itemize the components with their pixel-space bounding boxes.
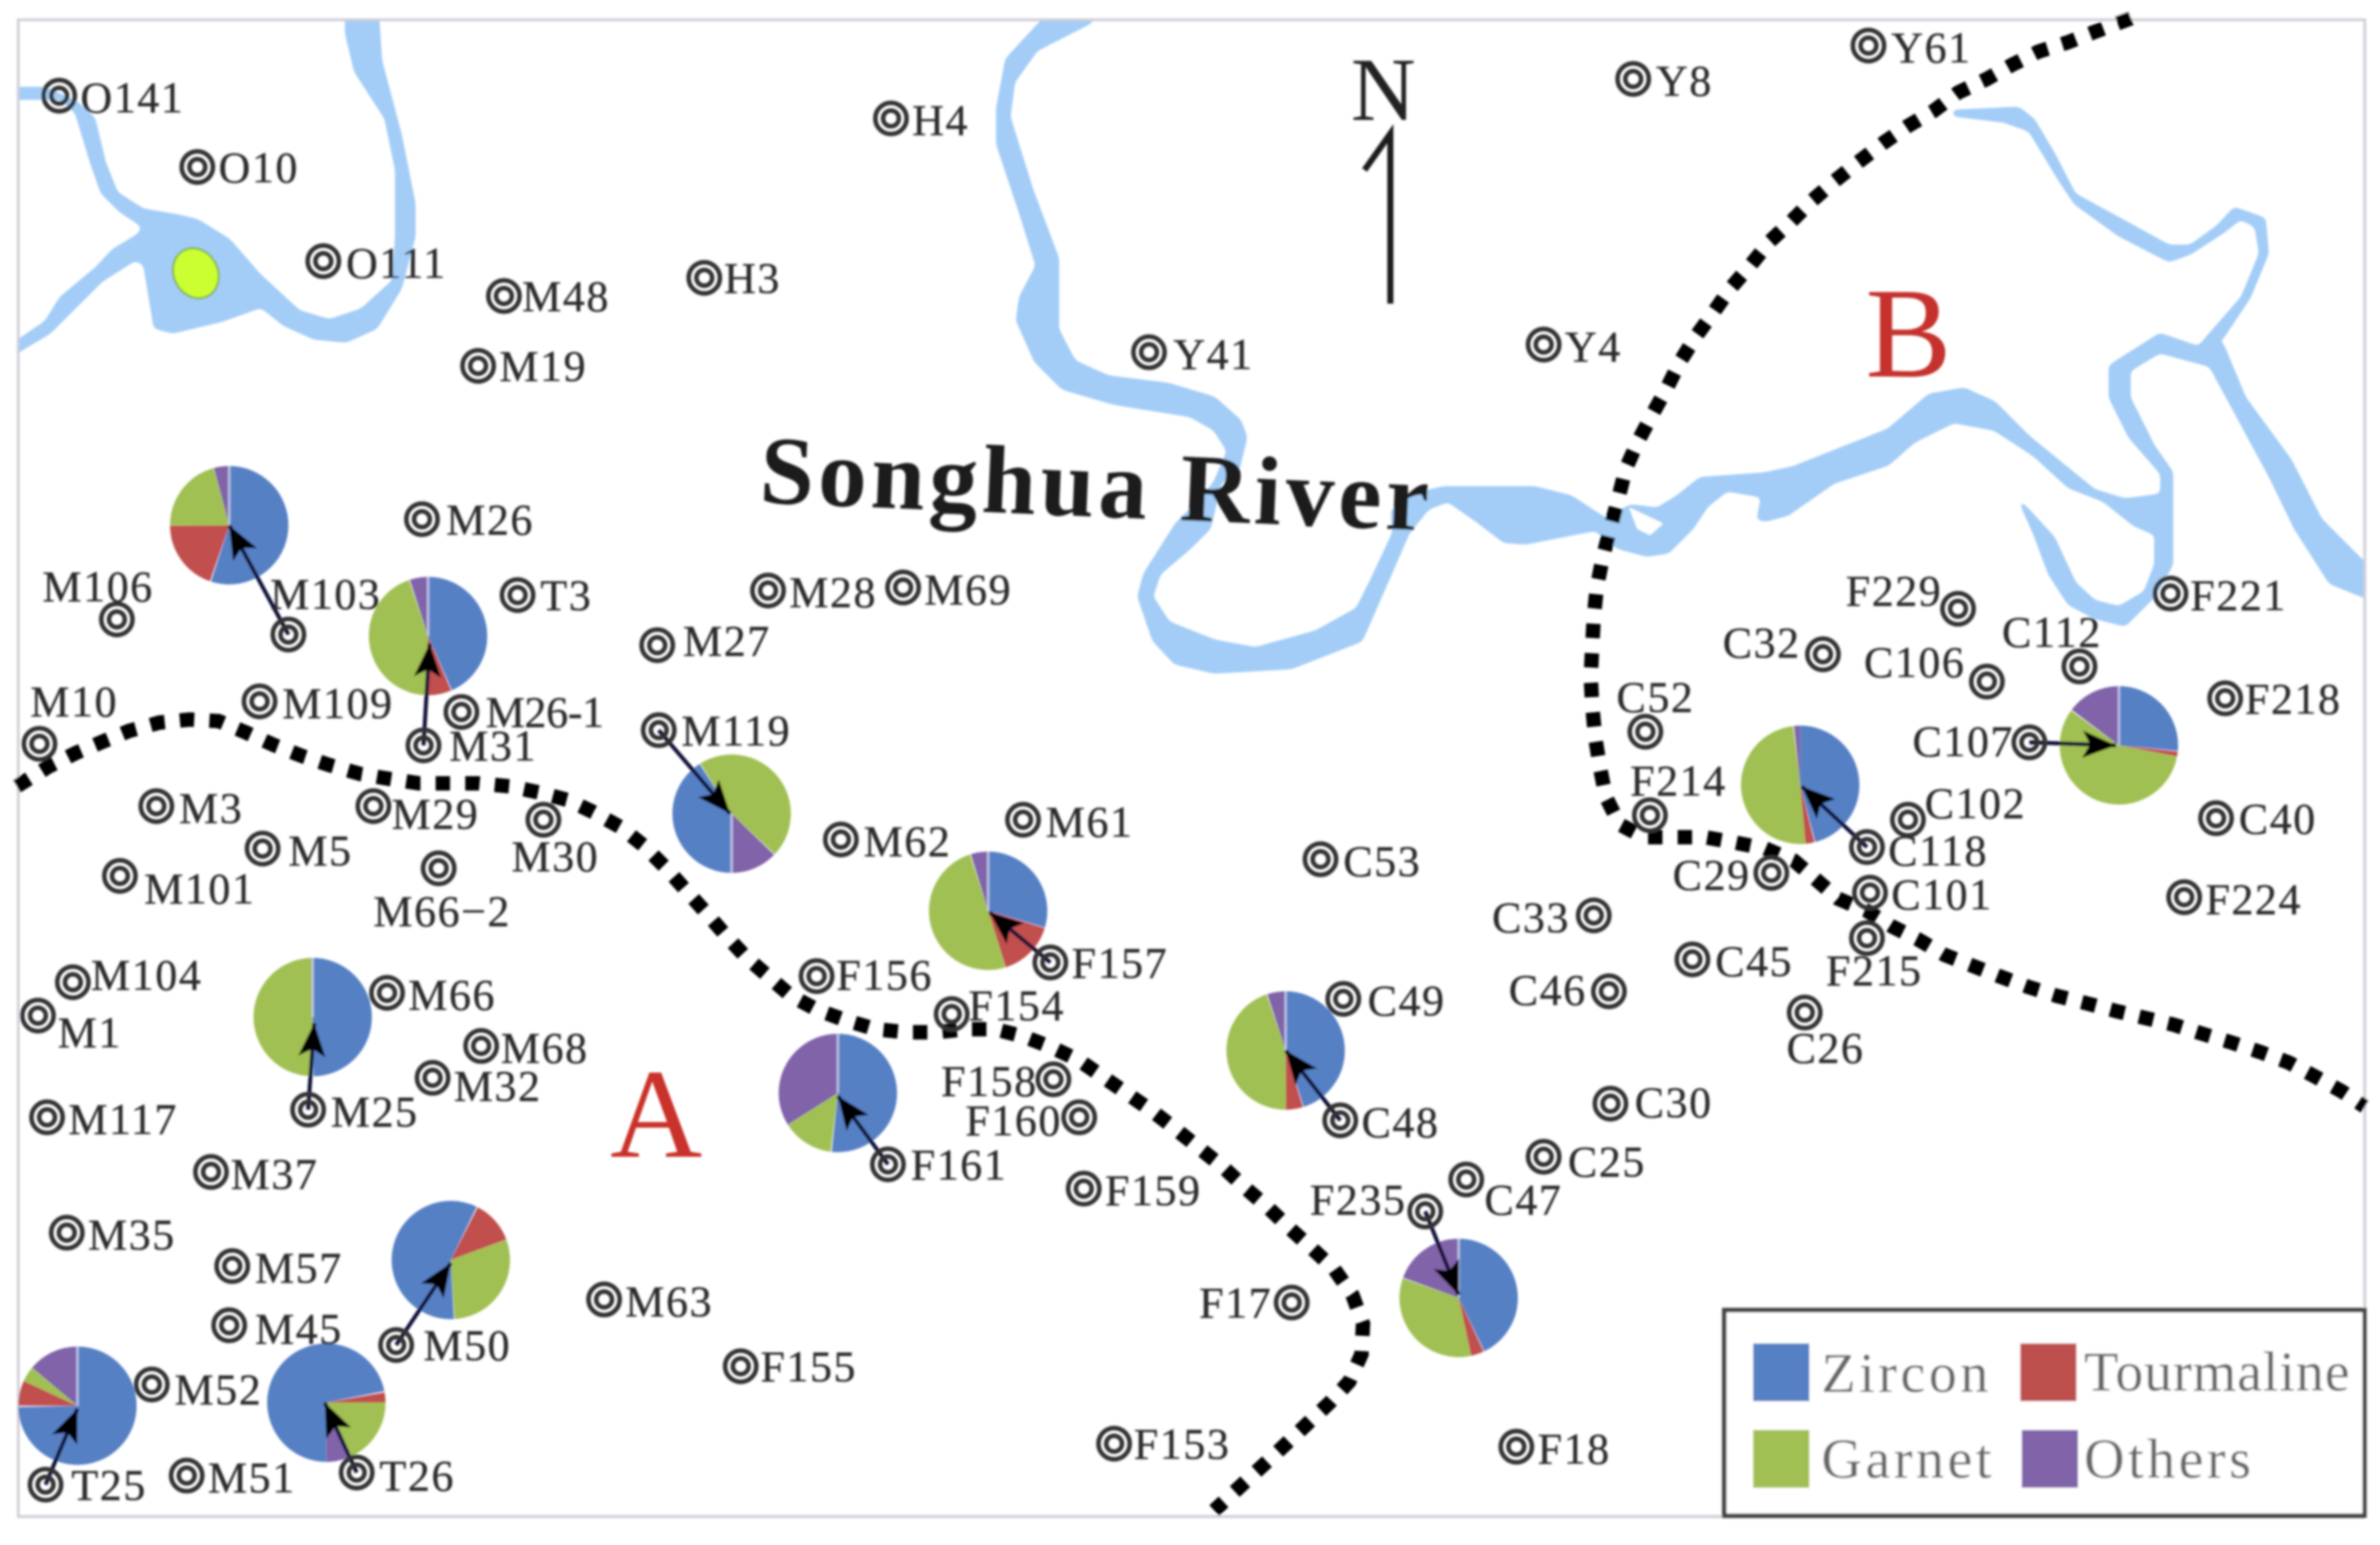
sampling sites: zone M: M32 [454, 1062, 541, 1111]
sampling sites: zone C and east: F221 [2191, 572, 2287, 620]
sampling sites: zone F: F235 [1310, 1175, 1407, 1224]
sampling sites: zone F: F159 [1105, 1166, 1202, 1215]
pie chart: T25 [35, 1347, 119, 1448]
pie chart: M31 [389, 577, 467, 675]
sampling sites: zone F: F161 [910, 1141, 1007, 1189]
sampling sites: zone C and east: C101 [1892, 871, 1992, 919]
legend [1724, 1311, 2365, 1516]
river: eastern loop and south-east branch [2019, 334, 2371, 626]
sampling sites: zone M [22, 496, 1133, 1510]
sampling sites: north: M19 [499, 342, 587, 391]
sampling sites: zone M: M5 [288, 826, 353, 875]
sampling sites: north: O10 [219, 143, 299, 192]
river island slit [1631, 509, 1662, 534]
sampling sites: zone C and east: C26 [1786, 1024, 1864, 1072]
pie chart: M25 [283, 958, 342, 1047]
sampling sites: zone C and east: F214 [1631, 757, 1727, 805]
sampling sites: zone C and east: C47 [1485, 1175, 1562, 1224]
sampling sites: north: M48 [522, 273, 610, 321]
sampling sites: zone M: M1 [58, 1009, 122, 1057]
sampling sites: zone M: M31 [449, 721, 537, 770]
north arrow [1351, 41, 1416, 304]
sampling sites: zone C and east: C106 [1864, 638, 1965, 687]
sampling sites: zone M: M66 [408, 971, 496, 1019]
sampling sites: zone F: F158 [941, 1057, 1038, 1106]
sampling sites: zone M: M29 [392, 790, 480, 839]
sampling sites: zone F [726, 939, 1610, 1473]
legend: Tourmaline [2084, 1340, 2350, 1403]
sampling sites: north: O111 [346, 239, 447, 288]
pie chart: M119 [690, 772, 773, 872]
sampling sites: zone C and east: F215 [1826, 946, 1923, 995]
sampling sites: zone C and east: C118 [1888, 826, 1988, 875]
sampling sites: north [43, 23, 1971, 391]
sampling sites: zone M: M28 [789, 568, 877, 617]
river: western branch and lake [12, 15, 414, 355]
sampling sites: zone M: M37 [231, 1149, 319, 1198]
sampling sites: zone M: M26-1 [486, 688, 606, 737]
sampling sites: zone C and east [1305, 567, 2341, 1224]
sampling sites: north: O141 [81, 73, 184, 122]
sampling sites: zone M: M35 [88, 1211, 176, 1259]
sampling sites: zone M: M10 [30, 678, 118, 726]
pie chart: C118 [1764, 749, 1836, 820]
sampling sites: zone M: M3 [179, 784, 243, 833]
sampling sites: zone M: M117 [68, 1095, 178, 1144]
sampling sites: zone M: M25 [331, 1088, 418, 1136]
sampling sites: zone M: M69 [925, 565, 1012, 614]
sampling sites: zone C and east: C25 [1568, 1138, 1646, 1187]
sampling sites: zone M: M61 [1046, 797, 1133, 846]
sampling sites: zone M: M104 [91, 951, 203, 1000]
sampling sites: zone C and east: C48 [1362, 1098, 1440, 1147]
pie chart: C107 [2077, 686, 2161, 787]
sampling sites: zone M: T26 [380, 1452, 455, 1501]
sampling sites: zone F: F153 [1134, 1420, 1231, 1469]
sampling sites: zone M: M30 [511, 833, 599, 881]
zone label A: A [610, 1044, 702, 1185]
sampling sites: zone C and east: C40 [2238, 795, 2317, 843]
sampling sites: zone M: M68 [501, 1024, 588, 1072]
sampling sites: zone C and east: C107 [1913, 717, 2014, 765]
pie chart: F161 [797, 1034, 879, 1134]
sampling sites: zone F: F160 [965, 1096, 1062, 1145]
dotted boundary: zone A [17, 719, 1363, 1510]
sampling sites: zone M: M106 [42, 562, 154, 611]
pie chart: T26 [287, 1364, 365, 1442]
sampling sites: zone C and east: C52 [1616, 673, 1694, 722]
pie chart: F235 [1419, 1239, 1498, 1337]
zone label B: B [1865, 261, 1952, 404]
sampling sites: zone M: M51 [208, 1453, 296, 1502]
legend: Zircon [1822, 1341, 1988, 1404]
sampling sites: zone C and east: C49 [1368, 977, 1446, 1026]
sampling sites: north: Y8 [1656, 57, 1713, 105]
arrows from sampling sites to pie charts [45, 526, 2115, 1485]
sampling sites: zone M: M50 [424, 1321, 511, 1370]
sampling sites: zone M: M62 [864, 818, 951, 866]
pie chart: M103 [192, 466, 267, 563]
river: north-east tributary [1954, 108, 2268, 346]
sampling sites: zone M: M101 [144, 865, 256, 913]
sampling sites: zone C and east: F229 [1846, 567, 1942, 616]
sampling sites: zone C and east: C29 [1673, 850, 1751, 899]
dotted boundary: zone B [1591, 19, 2365, 1107]
sampling sites: zone F: F155 [760, 1342, 857, 1391]
sampling sites: zone C and east: C112 [2002, 608, 2102, 657]
sampling sites: zone M: M119 [681, 706, 791, 755]
sampling sites: zone C and east: C45 [1716, 937, 1793, 986]
legend: Garnet [1822, 1427, 1992, 1490]
rivers [12, 15, 2371, 673]
sampling sites: zone C and east: C32 [1723, 619, 1800, 667]
sampling sites: zone M: M109 [282, 679, 394, 727]
sampling sites: north: Y4 [1565, 322, 1622, 371]
sampling sites: zone M: M103 [270, 570, 381, 619]
sampling sites: zone F: F156 [836, 951, 933, 1000]
sampling sites: north: Y41 [1173, 330, 1254, 379]
title: Songhua River: Songhua River [758, 416, 1432, 552]
sampling sites: zone M: M45 [255, 1304, 342, 1353]
sampling sites: north: H3 [724, 254, 781, 303]
sampling sites: zone C and east: C33 [1492, 893, 1570, 942]
north arrow: N [1351, 41, 1416, 140]
sampling sites: zone M: M63 [626, 1277, 713, 1326]
lake island [165, 240, 227, 306]
pie chart: M50 [411, 1220, 491, 1300]
sampling sites: north: Y61 [1892, 23, 1971, 72]
sampling sites: zone C and east: F218 [2245, 674, 2341, 723]
sampling sites: zone M: T3 [541, 572, 592, 620]
pie chart: C48 [1248, 991, 1323, 1088]
river: Songhua main channel [997, 19, 2170, 673]
sampling sites: zone C and east: C46 [1509, 966, 1586, 1015]
sampling sites: zone C and east: F224 [2206, 875, 2302, 924]
sampling sites: zone F: F18 [1538, 1425, 1610, 1473]
sampling sites: north: H4 [912, 96, 969, 145]
sampling sites: zone C and east: C53 [1343, 837, 1421, 886]
legend: Others [2084, 1427, 2251, 1490]
sampling sites: zone M: M27 [683, 617, 771, 665]
sampling sites: zone C and east: C102 [1924, 780, 2026, 828]
pie chart: F157 [951, 851, 1025, 948]
sampling sites: zone M: M57 [255, 1244, 342, 1293]
sampling sites: zone M: T25 [72, 1461, 147, 1510]
sampling sites: zone M: M66−2 [373, 887, 511, 935]
sampling sites: zone F: F17 [1199, 1279, 1272, 1327]
sampling sites: zone C and east: C30 [1635, 1079, 1713, 1127]
sampling sites: zone M: M52 [174, 1365, 262, 1414]
sampling sites: zone M: M26 [446, 496, 534, 544]
sampling sites: zone F: F154 [969, 981, 1065, 1030]
sampling sites: zone F: F157 [1071, 939, 1168, 988]
